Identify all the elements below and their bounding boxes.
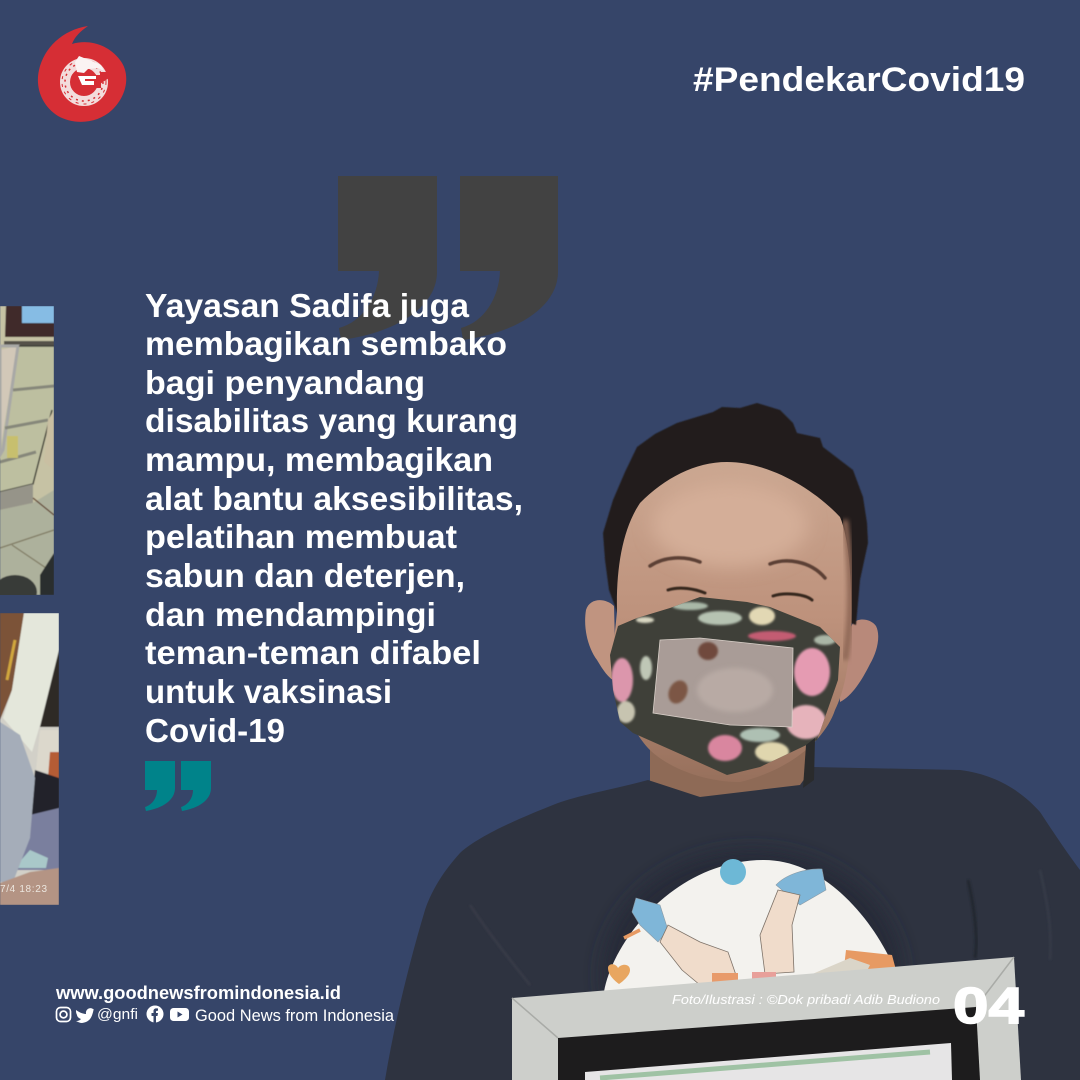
large dark quote mark [338,176,558,340]
quote text block: bagi penyandang [145,364,425,401]
shirt print [603,859,897,1000]
portrait: man in mask holding a frame [385,403,1080,1080]
icon: twitter [76,1008,94,1023]
page number: 04 [953,977,1025,1034]
footer: website and social handles [55,983,395,1025]
quote text block: mampu, membagikan [145,441,493,478]
icon: facebook [146,1006,164,1023]
left ear [585,600,616,682]
icon: youtube [170,1008,189,1021]
clear window on mask [653,638,793,727]
twitter and instagram handle: @gnfi [97,1006,138,1023]
quote text block: Covid-19 [145,712,285,749]
quote text block: dan mendampingi [145,596,436,633]
quote text block [145,287,523,749]
left photo: display case [0,306,54,609]
hashtag heading: #PendekarCovid19 [693,61,1025,99]
face [612,462,851,782]
shirt [385,767,1080,1080]
quote text block: disabilitas yang kurang [145,402,518,439]
logo: red swirl with eagle emblem [38,26,126,122]
quote text block: sabun dan deterjen, [145,557,465,594]
photo credit: Foto/Ilustrasi : ©Dok pribadi Adib Budiono [672,992,940,1007]
floral mask [610,597,840,775]
neck [650,745,806,800]
right ear [838,620,878,702]
small teal quote mark [145,761,211,811]
website: www.goodnewsfromindonesia.id [55,983,341,1003]
left photo: person and fabrics [0,613,59,905]
quote text block: Yayasan Sadifa juga [145,287,470,324]
icon: instagram [56,1008,70,1022]
hair [603,403,868,625]
quote text block: alat bantu aksesibilitas, [145,480,523,517]
quote text block: membagikan sembako [145,325,507,362]
quote text block: pelatihan membuat [145,518,457,555]
mask strap [803,738,815,788]
eyebrows and eyes [650,558,825,600]
picture frame [512,957,1021,1080]
left photo: person and fabrics: 7/4 18:23 [0,884,47,895]
quote text block: teman-teman difabel [145,634,481,671]
facebook and youtube name: Good News from Indonesia [195,1006,395,1025]
quote text block: untuk vaksinasi [145,673,392,710]
